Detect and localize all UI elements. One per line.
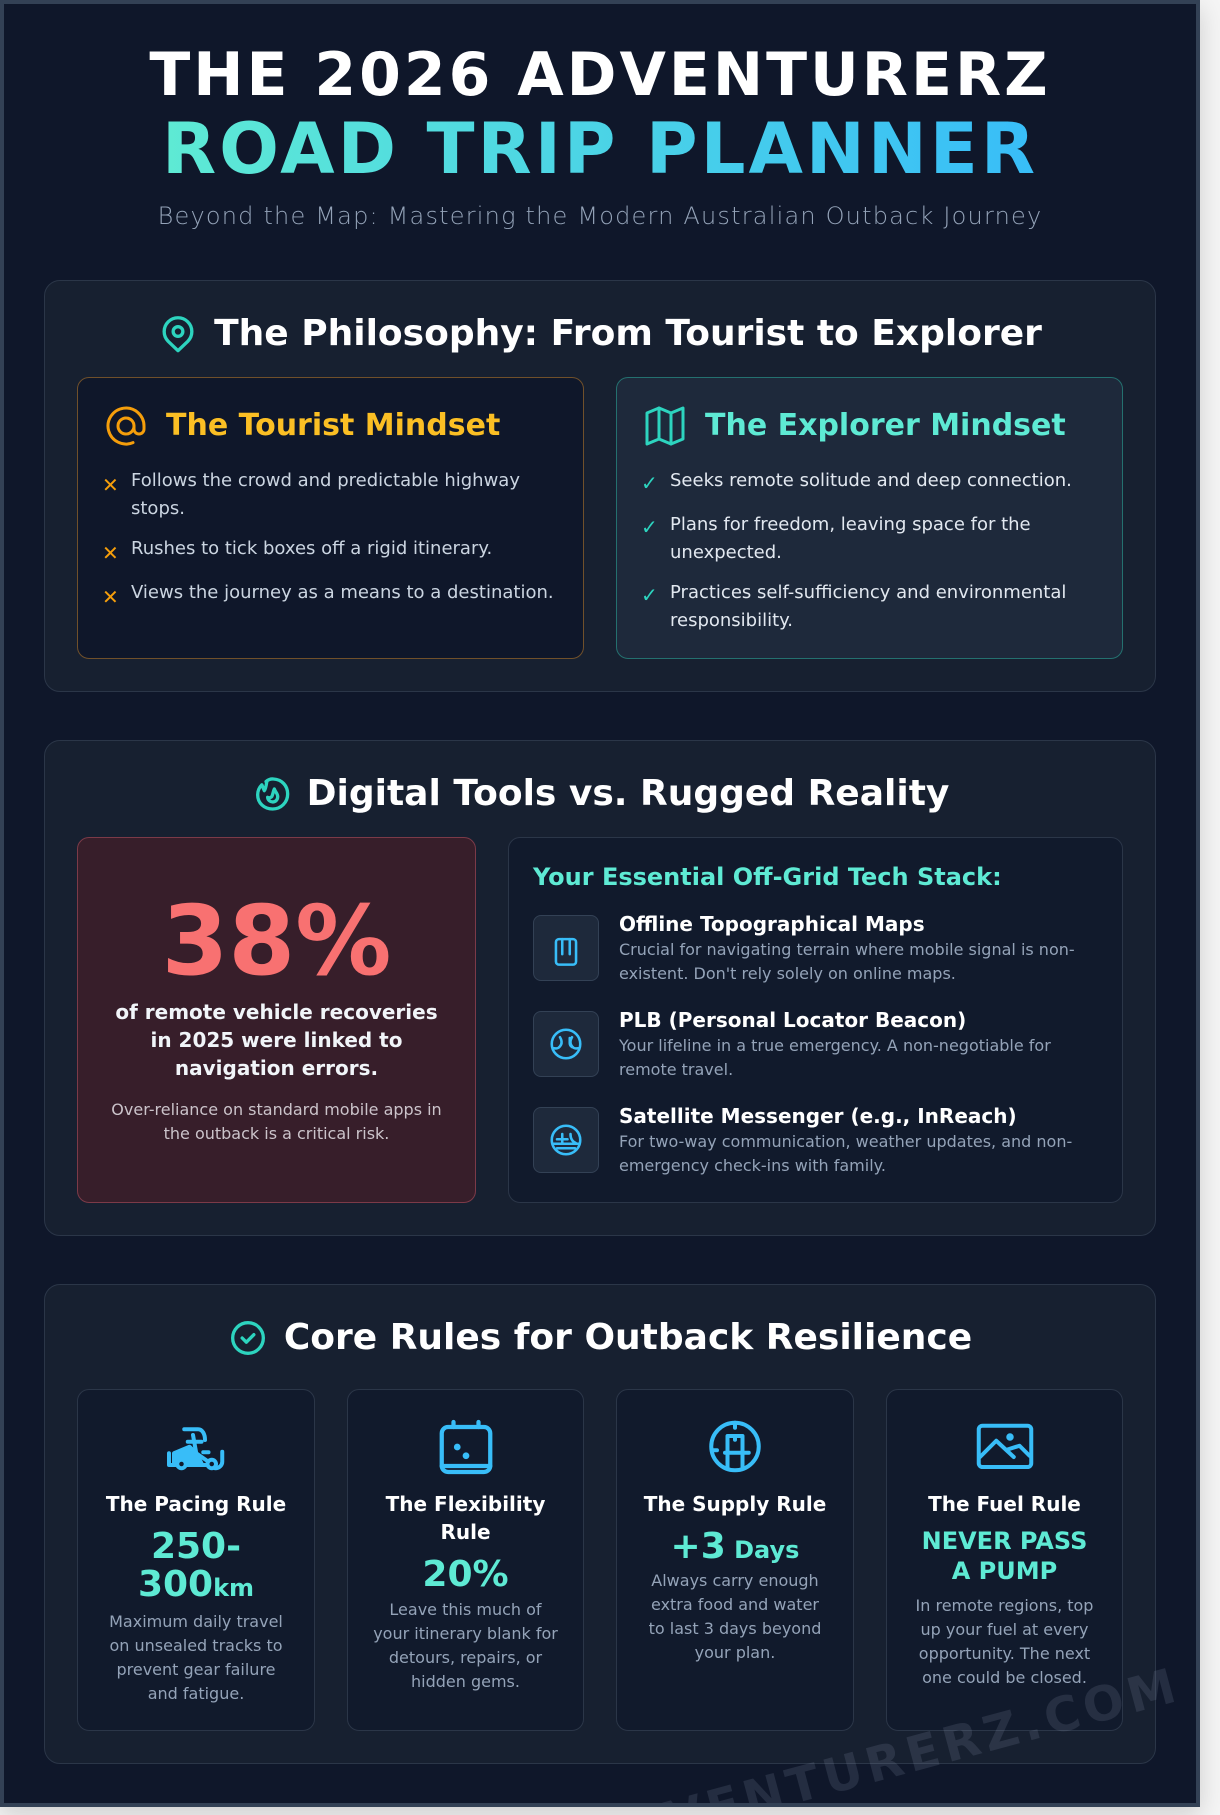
title line 1: THE 2026 ADVENTURERZ — [149, 40, 1051, 110]
text: satellite: Satellite Messenger (e.g., InReach) — [619, 1104, 1017, 1128]
panel: tech stack — [508, 837, 1123, 1203]
list: tourist traits: Rushes to tick boxes off a rigid itinerary. — [131, 538, 492, 559]
list: tourist traits: Follows the crowd and predictable highway stops. — [131, 470, 520, 519]
heading: philosophy: The Philosophy: From Tourist to Explorer — [214, 313, 1042, 354]
panel: explorer mindset — [616, 377, 1123, 659]
heading: core rules: Core Rules for Outback Resilience — [284, 1317, 972, 1358]
text: satellite — [619, 1104, 1072, 1175]
card: supply rule — [616, 1389, 854, 1731]
icon: beacon — [533, 1011, 599, 1077]
stat note: Over-reliance on standard mobile apps in the outback is a critical risk. — [111, 1100, 442, 1143]
icon: vehicle — [167, 1427, 224, 1470]
text: offline maps: Crucial for navigating terrain where mobile signal is non-existent. Don't rely solely on online maps. — [619, 940, 1075, 983]
text: PLB: Your lifeline in a true emergency. A non-negotiable for remote travel. — [619, 1036, 1051, 1079]
title: The Flexibility Rule — [386, 1492, 545, 1544]
big number: 38% — [162, 885, 391, 997]
text: PLB — [619, 1008, 1051, 1079]
description: Always carry enough extra food and water to last 3 days beyond your plan. — [649, 1571, 821, 1662]
icon: supply — [709, 1420, 761, 1472]
subtitle: Beyond the Map: Mastering the Modern Australian Outback Journey — [158, 202, 1042, 230]
panel: core rules — [44, 1284, 1156, 1764]
list: tourist traits: ✕ — [102, 473, 119, 497]
list: explorer traits: Seeks remote solitude and deep connection. — [670, 470, 1072, 491]
icon: landscape — [976, 1424, 1034, 1469]
value: NEVER PASS A PUMP — [922, 1527, 1087, 1585]
title: The Pacing Rule — [106, 1492, 286, 1516]
list: explorer traits — [641, 470, 1072, 631]
description: In remote regions, top up your fuel at every opportunity. The next one could be closed. — [916, 1596, 1093, 1687]
list: tourist traits: Views the journey as a means to a destination. — [131, 582, 554, 603]
list: explorer traits: ✓ — [641, 515, 658, 539]
panel: digital tools — [44, 740, 1156, 1236]
icon: tablet — [533, 915, 599, 981]
stat description: of remote vehicle recoveries in 2025 were linked to navigation errors. — [115, 1000, 438, 1080]
heading: tech stack: Your Essential Off-Grid Tech Stack: — [533, 863, 1002, 891]
heading: explorer: The Explorer Mindset — [705, 408, 1066, 443]
list: explorer traits: ✓ — [641, 471, 658, 495]
heading: tourist: The Tourist Mindset — [166, 408, 500, 443]
heading: digital tools: Digital Tools vs. Rugged Reality — [307, 773, 949, 814]
list: explorer traits: Practices self-sufficiency and environmental responsibility. — [670, 582, 1066, 631]
item: offline maps — [533, 912, 1075, 983]
card: pacing rule — [77, 1389, 315, 1731]
title line 2: ROAD TRIP PLANNER — [162, 108, 1038, 190]
title: The Supply Rule — [644, 1492, 826, 1516]
card: fuel rule — [886, 1389, 1123, 1731]
text: offline maps — [619, 912, 1075, 983]
text: satellite: For two-way communication, weather updates, and non-emergency check-ins with family. — [619, 1132, 1072, 1175]
item: PLB — [533, 1008, 1051, 1079]
list: tourist traits: ✕ — [102, 541, 119, 565]
list: tourist traits — [102, 470, 554, 609]
description: Leave this much of your itinerary blank for detours, repairs, or hidden gems. — [373, 1600, 558, 1691]
value: 250-300km — [138, 1526, 254, 1605]
card: flexibility rule — [347, 1389, 584, 1731]
list: tourist traits: ✕ — [102, 585, 119, 609]
description: Maximum daily travel on unsealed tracks to prevent gear failure and fatigue. — [109, 1612, 283, 1703]
icon: satellite — [533, 1107, 599, 1173]
item: satellite messenger — [533, 1104, 1072, 1175]
panel: tourist mindset — [77, 377, 584, 659]
text: offline maps: Offline Topographical Maps — [619, 912, 925, 936]
icon: calendar — [440, 1420, 492, 1474]
stat card: 38 percent — [77, 837, 476, 1203]
list: explorer traits: Plans for freedom, leaving space for the unexpected. — [670, 514, 1031, 563]
panel: philosophy — [44, 280, 1156, 692]
list: explorer traits: ✓ — [641, 583, 658, 607]
value: +3 Days — [671, 1526, 799, 1567]
text: PLB: PLB (Personal Locator Beacon) — [619, 1008, 966, 1032]
title: The Fuel Rule — [928, 1492, 1081, 1516]
value: 20% — [422, 1554, 509, 1595]
